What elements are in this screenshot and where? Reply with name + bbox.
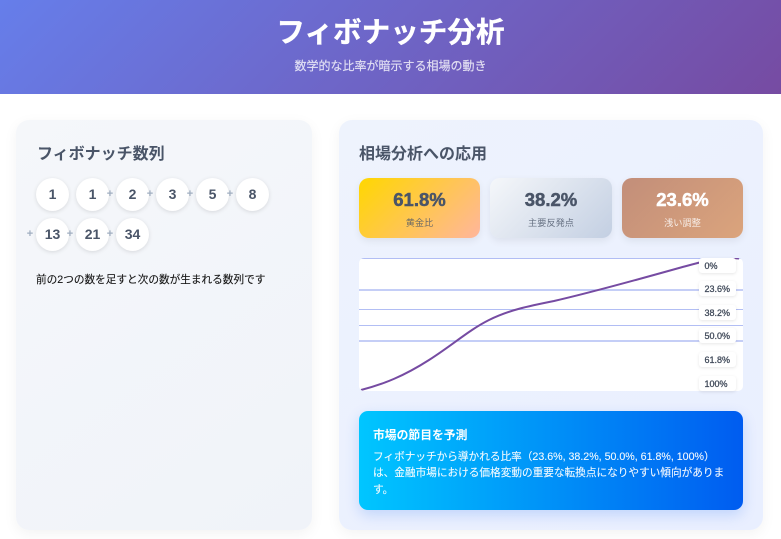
heading: Fibonacci sequence: フィボナッチ数列 (37, 146, 165, 163)
card: golden ratio (359, 178, 480, 238)
card: shallow correction (622, 178, 743, 238)
level labels: 0% (704, 261, 718, 271)
level labels: 38.2% (704, 308, 730, 318)
sequence of numbers: 8 (249, 186, 256, 202)
sequence of numbers: 1 (49, 186, 56, 202)
sequence of numbers: + (227, 188, 233, 200)
panel: market analysis (339, 120, 763, 530)
callout heading: 市場の節目を予測 (373, 428, 467, 442)
sequence of numbers: 1 (89, 186, 96, 202)
card: golden ratio: 61.8% (393, 189, 446, 210)
panel: Fibonacci sequence (16, 120, 312, 530)
level labels: 100% (704, 379, 728, 389)
callout body (373, 450, 724, 496)
level labels: 23.6% (704, 284, 730, 294)
card: major reversal: 主要反発点 (528, 218, 574, 228)
sequence of numbers: + (147, 188, 153, 200)
sequence of numbers: + (27, 228, 33, 240)
sequence of numbers: + (107, 228, 113, 240)
sequence of numbers: + (107, 188, 113, 200)
sequence of numbers: + (67, 228, 73, 240)
description: 前の2つの数を足すと次の数が生まれる数列です (36, 274, 265, 286)
callout body: フィボナッチから導かれる比率（23.6%, 38.2%, 50.0%, 61.8%, 100%） (373, 450, 715, 462)
sequence of numbers: 34 (125, 226, 140, 242)
card: major reversal (490, 178, 612, 238)
sequence of numbers: 13 (45, 226, 60, 242)
card: shallow correction: 23.6% (656, 189, 709, 210)
sequence of numbers: + (187, 188, 193, 200)
chart: Fibonacci retracement (359, 258, 743, 391)
card: golden ratio: 黄金比 (406, 218, 433, 228)
subtitle: 数学的な比率が暗示する相場の動き (294, 59, 486, 73)
header (0, 0, 781, 94)
sequence of numbers: 21 (85, 226, 100, 242)
level labels: 61.8% (704, 355, 730, 365)
heading: market analysis: 相場分析への応用 (359, 146, 487, 163)
card: major reversal: 38.2% (525, 189, 577, 210)
callout (359, 411, 743, 510)
sequence of numbers: 5 (209, 186, 216, 202)
sequence of numbers: 2 (129, 186, 136, 202)
card: shallow correction: 浅い調整 (664, 218, 701, 228)
callout body: は、金融市場における価格変動の重要な転換点になりやすい傾向がありま (373, 467, 724, 479)
title: フィボナッチ分析 (276, 17, 505, 49)
level labels: 50.0% (704, 331, 730, 341)
callout body: す。 (373, 484, 393, 496)
sequence of numbers: 3 (169, 186, 176, 202)
